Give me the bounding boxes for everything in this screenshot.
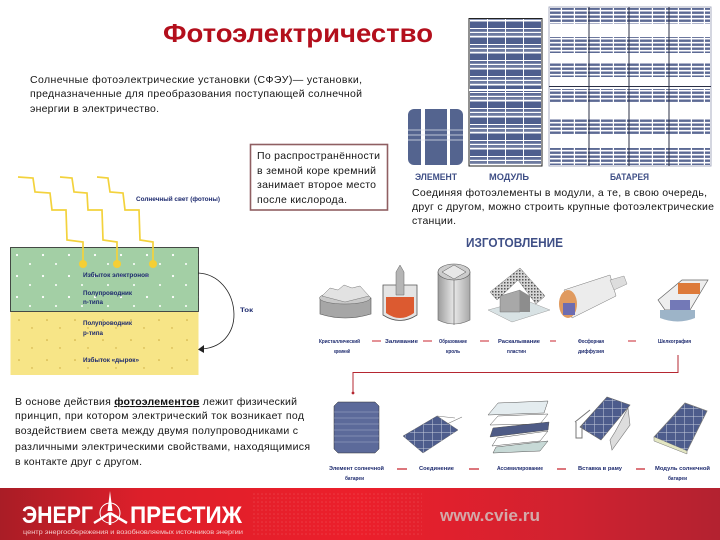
p-type layer — [10, 312, 198, 375]
text: photocell principle: В основе действия фотоэлементов лежит физический — [15, 396, 297, 408]
manufacturing process — [319, 235, 711, 482]
step 6: lithography — [658, 280, 708, 345]
step 2: melting: Заливание — [385, 339, 418, 345]
step 1: crystalline silicon: Кристаллический — [319, 338, 360, 345]
step 8: connection: Соединение — [419, 466, 454, 472]
intro text: предназначенные для преобразования поступающей солнечной — [30, 88, 362, 100]
step 7: solar cell — [329, 402, 385, 482]
step 11: solar module: батареи — [668, 475, 687, 482]
step 10: framing: Вставка в раму — [578, 466, 623, 472]
website: www.cvie.ru — [439, 507, 540, 525]
intro text: энергии в электричество. — [30, 103, 159, 115]
text: photocell principle: в контакте друг с другом. — [15, 456, 142, 468]
callout: silicon: в земной коре кремний — [257, 165, 376, 177]
step 5: phosphorus diffusion: диффузия — [578, 348, 604, 355]
text: modules and stations: друг с другом, можно строить крупные фотоэлектрические — [412, 201, 714, 213]
label: current: Ток — [240, 307, 254, 314]
footer band — [0, 488, 720, 540]
callout: silicon: после кислорода. — [257, 194, 347, 206]
p-type layer: p-типа — [83, 330, 104, 337]
p-type layer: Избыток «дырок» — [83, 357, 140, 364]
ray arrowheads — [79, 260, 157, 268]
step 8: connection — [403, 416, 462, 472]
title: Фотоэлектричество — [163, 18, 433, 48]
text: modules and stations: Соединяя фотоэлементы в модули, а те, в свою очередь, — [412, 187, 707, 199]
arrows: top row — [372, 340, 636, 342]
step 6: lithography: Шелкография — [658, 338, 691, 345]
callout: silicon: По распространённости — [257, 150, 380, 162]
text: modules and stations: станции. — [412, 215, 456, 227]
step 9: lamination — [488, 401, 549, 472]
text: photocell principle — [15, 396, 310, 468]
connector arrow: to second row — [352, 355, 678, 394]
text: photocell principle: различными электрическими свойствами, находящимися — [15, 441, 310, 453]
label: module: МОДУЛЬ — [489, 172, 529, 183]
arrow: current — [198, 273, 234, 353]
step 1: crystalline silicon — [319, 285, 371, 355]
logo — [22, 491, 243, 536]
sun rays — [18, 177, 153, 263]
label: sunlight: Солнечный свет (фотоны) — [136, 196, 220, 203]
step 4: wafer sawing: пластин — [507, 349, 526, 355]
step 5: phosphorus diffusion: Фосфорная — [578, 338, 604, 345]
icon: solar cell — [408, 109, 463, 165]
text: modules and stations — [412, 187, 714, 227]
icon: logo turbine — [94, 491, 127, 525]
n-type layer — [10, 248, 198, 312]
step 10: framing — [575, 397, 630, 472]
step 9: lamination: Ассимилирование — [497, 466, 543, 472]
photovoltaic cell diagram — [10, 177, 254, 375]
n-type layer: Избыток электронов — [83, 272, 149, 279]
step 1: crystalline silicon: кремний — [334, 348, 350, 355]
step 5: phosphorus diffusion — [559, 275, 627, 355]
intro text — [30, 74, 362, 115]
p-type layer: Полупроводник — [83, 320, 133, 327]
intro text: Солнечные фотоэлектрические установки (СФЭУ)— установки, — [30, 74, 362, 86]
callout: silicon — [250, 144, 388, 210]
n-type layer: Полупроводник — [83, 290, 133, 297]
step 4: wafer sawing — [488, 268, 550, 355]
step 11: solar module: Модуль солнечной — [655, 465, 711, 472]
logo: ЭНЕРГ — [22, 502, 93, 529]
step 3: crust: кроль — [446, 349, 460, 355]
step 11: solar module — [654, 403, 711, 482]
step 4: wafer sawing: Раскалывание — [498, 339, 540, 345]
step 7: solar cell: батареи — [345, 475, 364, 482]
step 3: crust — [438, 264, 470, 355]
logo: ПРЕСТИЖ — [130, 502, 242, 529]
icon: solar array — [549, 7, 711, 166]
heading: manufacturing: ИЗГОТОВЛЕНИЕ — [466, 235, 563, 250]
n-type layer: n-типа — [83, 299, 104, 306]
label: element: ЭЛЕМЕНТ — [415, 172, 457, 183]
callout: silicon: занимает второе место — [257, 179, 376, 191]
text: photocell principle: воздействием света между двумя полупроводниками с — [15, 425, 298, 437]
logo: центр энергосбережения и возобновляемых источников энергии — [23, 530, 243, 536]
label: array: БАТАРЕЯ — [610, 172, 649, 183]
step 7: solar cell: Элемент солнечной — [329, 465, 385, 472]
solar panels diagram — [408, 7, 711, 183]
step 2: melting — [383, 265, 418, 345]
text: photocell principle: принцип, при котором электрический ток возникает под — [15, 410, 304, 422]
arrows: bottom row — [397, 468, 645, 470]
step 3: crust: Образование — [439, 338, 467, 345]
icon: solar module — [469, 18, 542, 166]
